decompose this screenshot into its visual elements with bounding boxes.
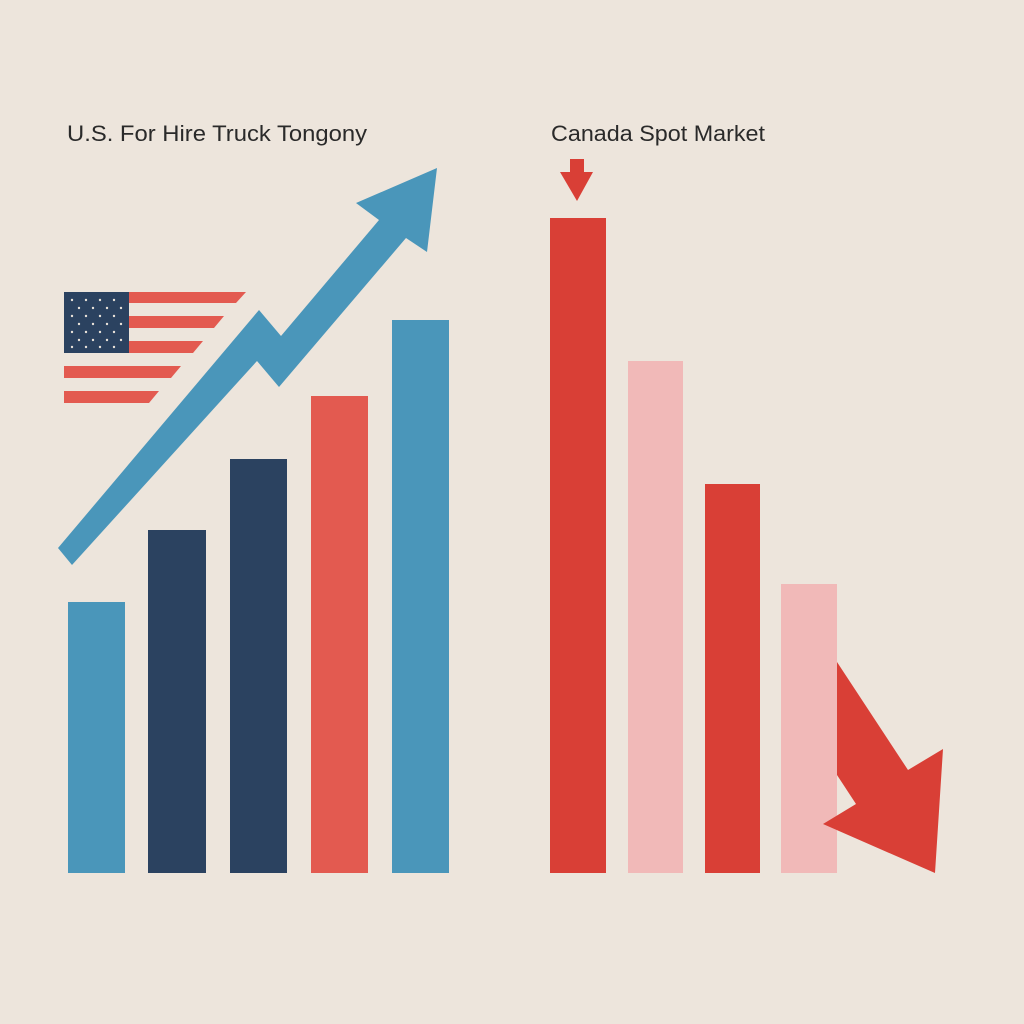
title: US: U.S. For Hire Truck Tongony [67, 121, 367, 146]
bar chart: Canada [550, 218, 837, 873]
arrow: red downward trend [823, 662, 943, 873]
arrow: blue upward trend [58, 168, 437, 565]
icon: small down arrow [560, 159, 593, 201]
icon: US flag [64, 292, 246, 403]
title: Canada: Canada Spot Market [551, 121, 765, 146]
bar chart: US [68, 320, 449, 873]
